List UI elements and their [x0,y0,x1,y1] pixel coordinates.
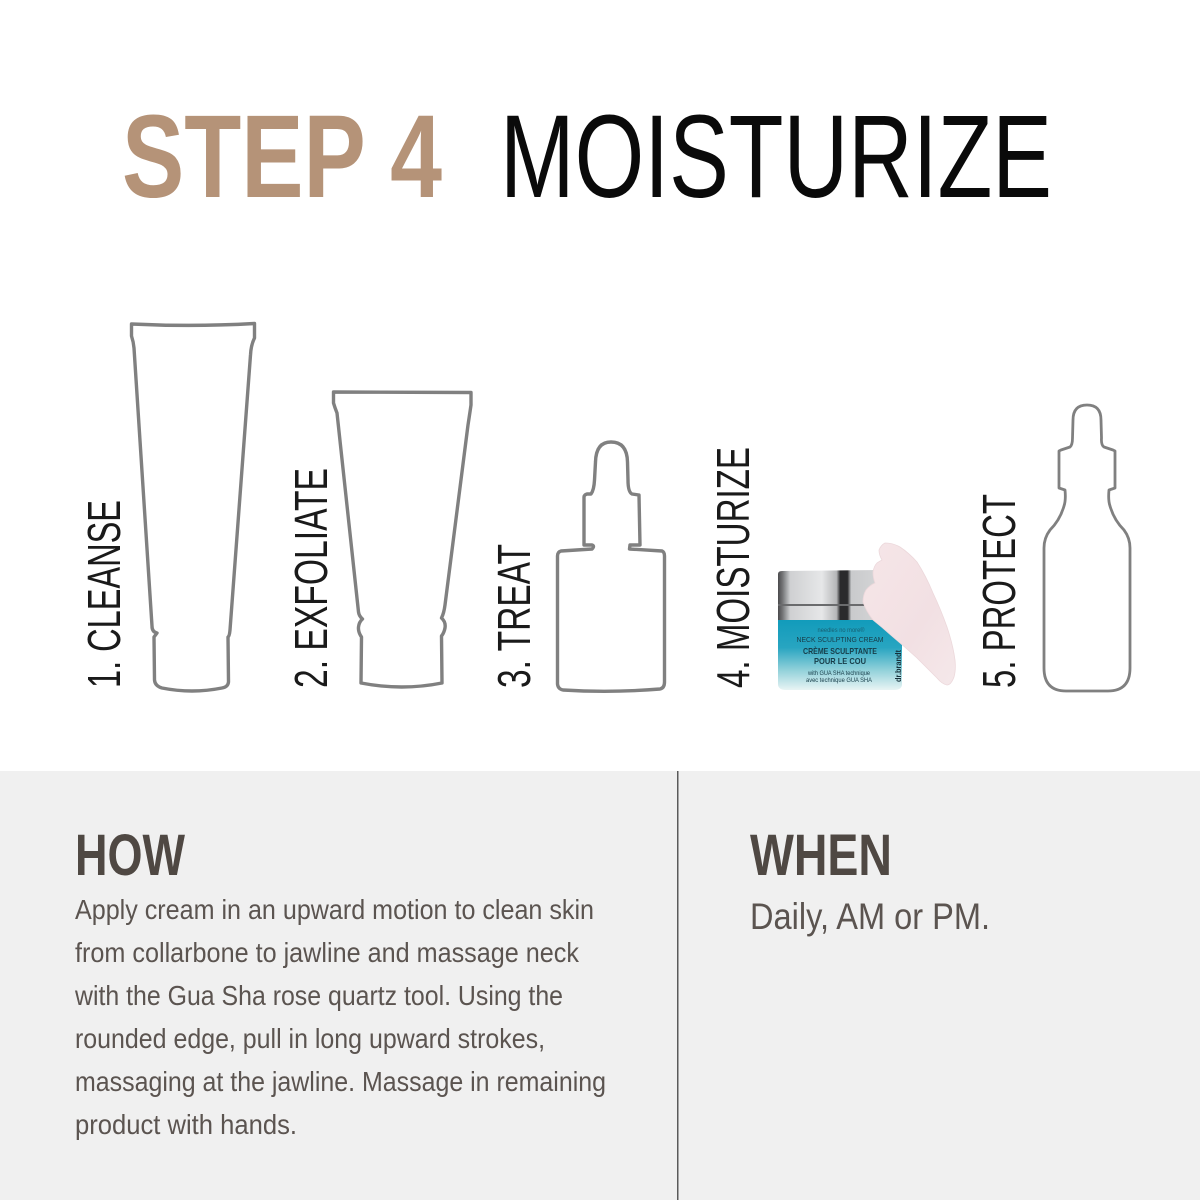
how instructions text: product with hands. [75,1109,297,1140]
jar label text: dr.brandt [894,650,903,682]
how instructions text [74,894,606,1140]
panel divider [677,771,678,1200]
jar cap [778,570,900,620]
label: step 2: 2. EXFOLIATE [285,468,337,688]
how instructions text: massaging at the jawline. Massage in remaining [75,1066,606,1097]
jar label text: avec technique GUA SHA [806,677,873,684]
jar label text: NECK SCULPTING CREAM [796,635,884,644]
jar body [778,617,902,690]
jar label text: with GUA SHA technique [807,670,870,677]
how instructions text: with the Gua Sha rose quartz tool. Using the [74,980,563,1011]
icon: cleanser tube outline [132,324,254,691]
how instructions text: Apply cream in an upward motion to clean skin [75,894,594,925]
label: step 4: 4. MOISTURIZE [707,447,759,688]
icon: protect dropper bottle outline [1044,405,1130,691]
product: neck sculpting cream jar [778,543,955,690]
title: step number: STEP 4 [122,91,442,223]
jar label text: needles no more® [818,626,865,634]
when text: Daily, AM or PM. [750,896,990,937]
icon: treatment bottle outline [558,442,664,691]
heading: how: HOW [75,823,185,888]
how instructions text: from collarbone to jawline and massage neck [75,937,580,968]
label: step 5: 5. PROTECT [973,494,1025,688]
title [122,91,1052,223]
panel: how and when background [0,771,1200,1200]
jar label text: CRÈME SCULPTANTE [803,646,877,656]
how instructions text: rounded edge, pull in long upward strokes, [75,1023,545,1054]
routine steps row [78,324,1130,691]
panel: how [74,823,606,1140]
label: step 1: 1. CLEANSE [78,500,130,688]
jar label text [796,626,903,684]
icon: exfoliator tube outline [334,392,471,687]
panel: when [750,823,990,937]
heading: when: WHEN [750,823,892,888]
gua sha rose quartz tool [863,543,955,685]
label: step 3: 3. TREAT [488,544,540,688]
jar label text: POUR LE COU [814,656,866,666]
